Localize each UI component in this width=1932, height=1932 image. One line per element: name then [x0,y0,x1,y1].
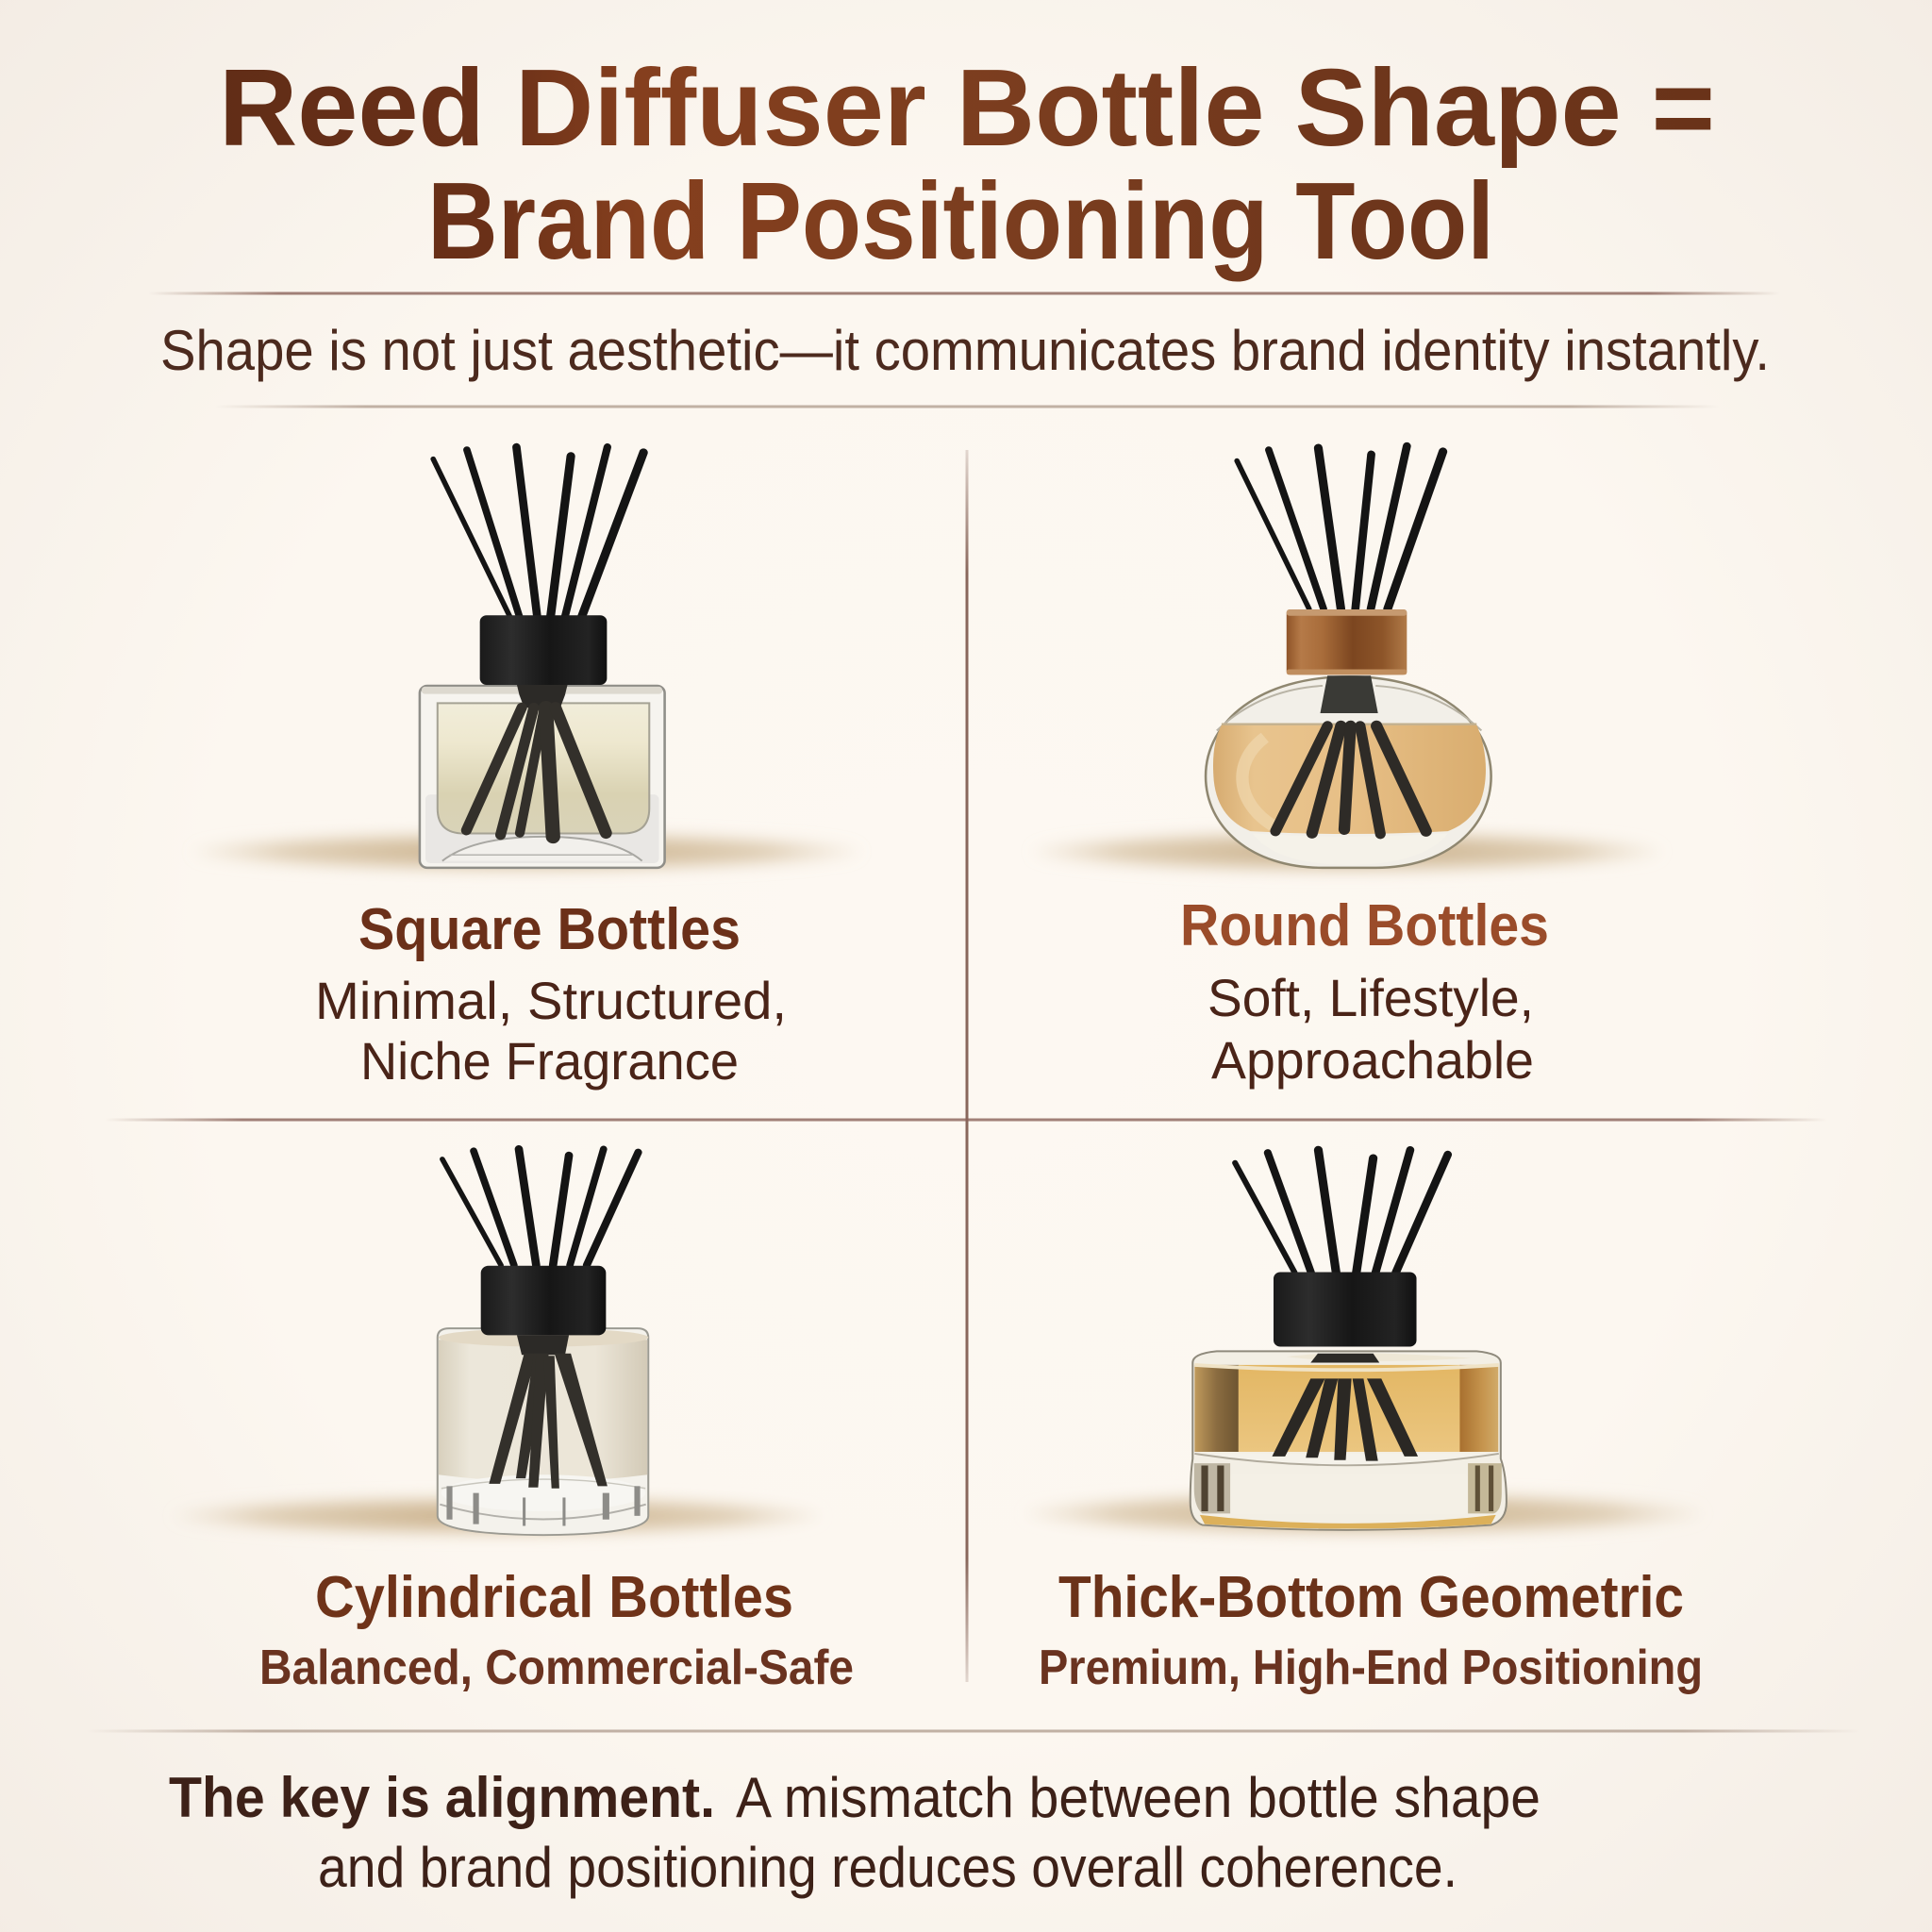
description: round bottles: Soft, Lifestyle, [1208,968,1534,1027]
panel: square bottles [194,447,858,1091]
heading: cylindrical bottles: Cylindrical Bottles [315,1565,793,1630]
title [219,46,1715,282]
description: round bottles [1208,968,1534,1090]
heading: round bottles: Round Bottles [1180,893,1549,958]
heading: thick-bottom geometric: Thick-Bottom Geometric [1058,1565,1684,1630]
panel: cylindrical bottles [175,1149,854,1695]
icon: cylindrical reed diffuser bottle [175,1149,820,1536]
icon: thick-bottom geometric reed diffuser bottle [1026,1150,1701,1536]
icon: square reed diffuser bottle [194,447,858,872]
description: square bottles: Niche Fragrance [360,1031,739,1091]
panel: round bottles [1034,446,1659,1090]
icon: round reed diffuser bottle [1034,446,1659,873]
description: thick-bottom geometric: Premium, High-End Positioning [1039,1641,1703,1695]
heading: square bottles: Square Bottles [358,897,741,962]
footer: key takeaway: A mismatch between bottle shape [736,1766,1541,1829]
footer: key takeaway: and brand positioning reduces overall coherence. [318,1836,1457,1899]
description: square bottles: Minimal, Structured, [315,971,787,1030]
footer: key takeaway: The key is alignment. [169,1766,715,1829]
description: round bottles: Approachable [1211,1030,1534,1090]
description: cylindrical bottles: Balanced, Commercial-Safe [259,1641,854,1695]
footer: key takeaway [169,1766,1541,1899]
title: Brand Positioning Tool [427,159,1494,282]
title: Reed Diffuser Bottle Shape = [219,46,1715,169]
description: square bottles [315,971,787,1091]
subtitle: Shape is not just aesthetic—it communicates brand identity instantly. [160,319,1770,382]
panel: thick-bottom geometric [1026,1150,1703,1695]
